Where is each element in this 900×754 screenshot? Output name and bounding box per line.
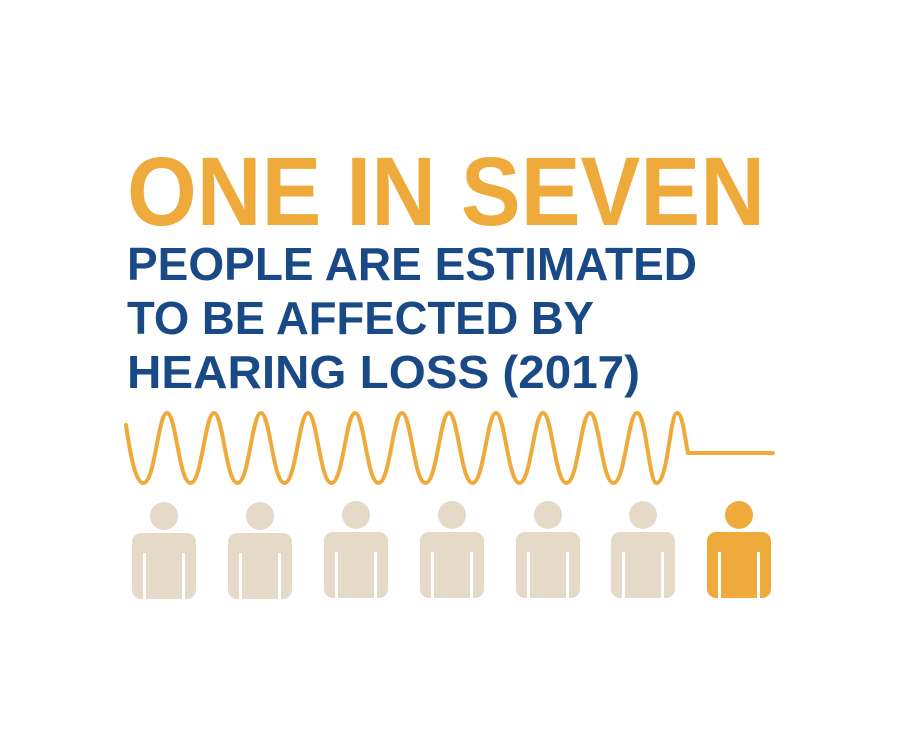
icon: person 3	[324, 501, 388, 598]
subtitle text block	[127, 238, 697, 398]
icon: person 1	[132, 502, 196, 599]
title: ONE IN SEVEN	[127, 137, 765, 246]
icon: person 2	[228, 502, 292, 599]
people icons row	[132, 501, 771, 599]
sound wave	[126, 413, 773, 483]
icon: person 4	[420, 501, 484, 598]
icon: person 6	[611, 501, 675, 598]
subtitle text block: HEARING LOSS (2017)	[127, 346, 640, 398]
subtitle text block: PEOPLE ARE ESTIMATED	[127, 238, 697, 290]
subtitle text block: TO BE AFFECTED BY	[127, 292, 594, 344]
icon: person 5	[516, 501, 580, 598]
icon: person 7 highlighted	[707, 501, 771, 598]
